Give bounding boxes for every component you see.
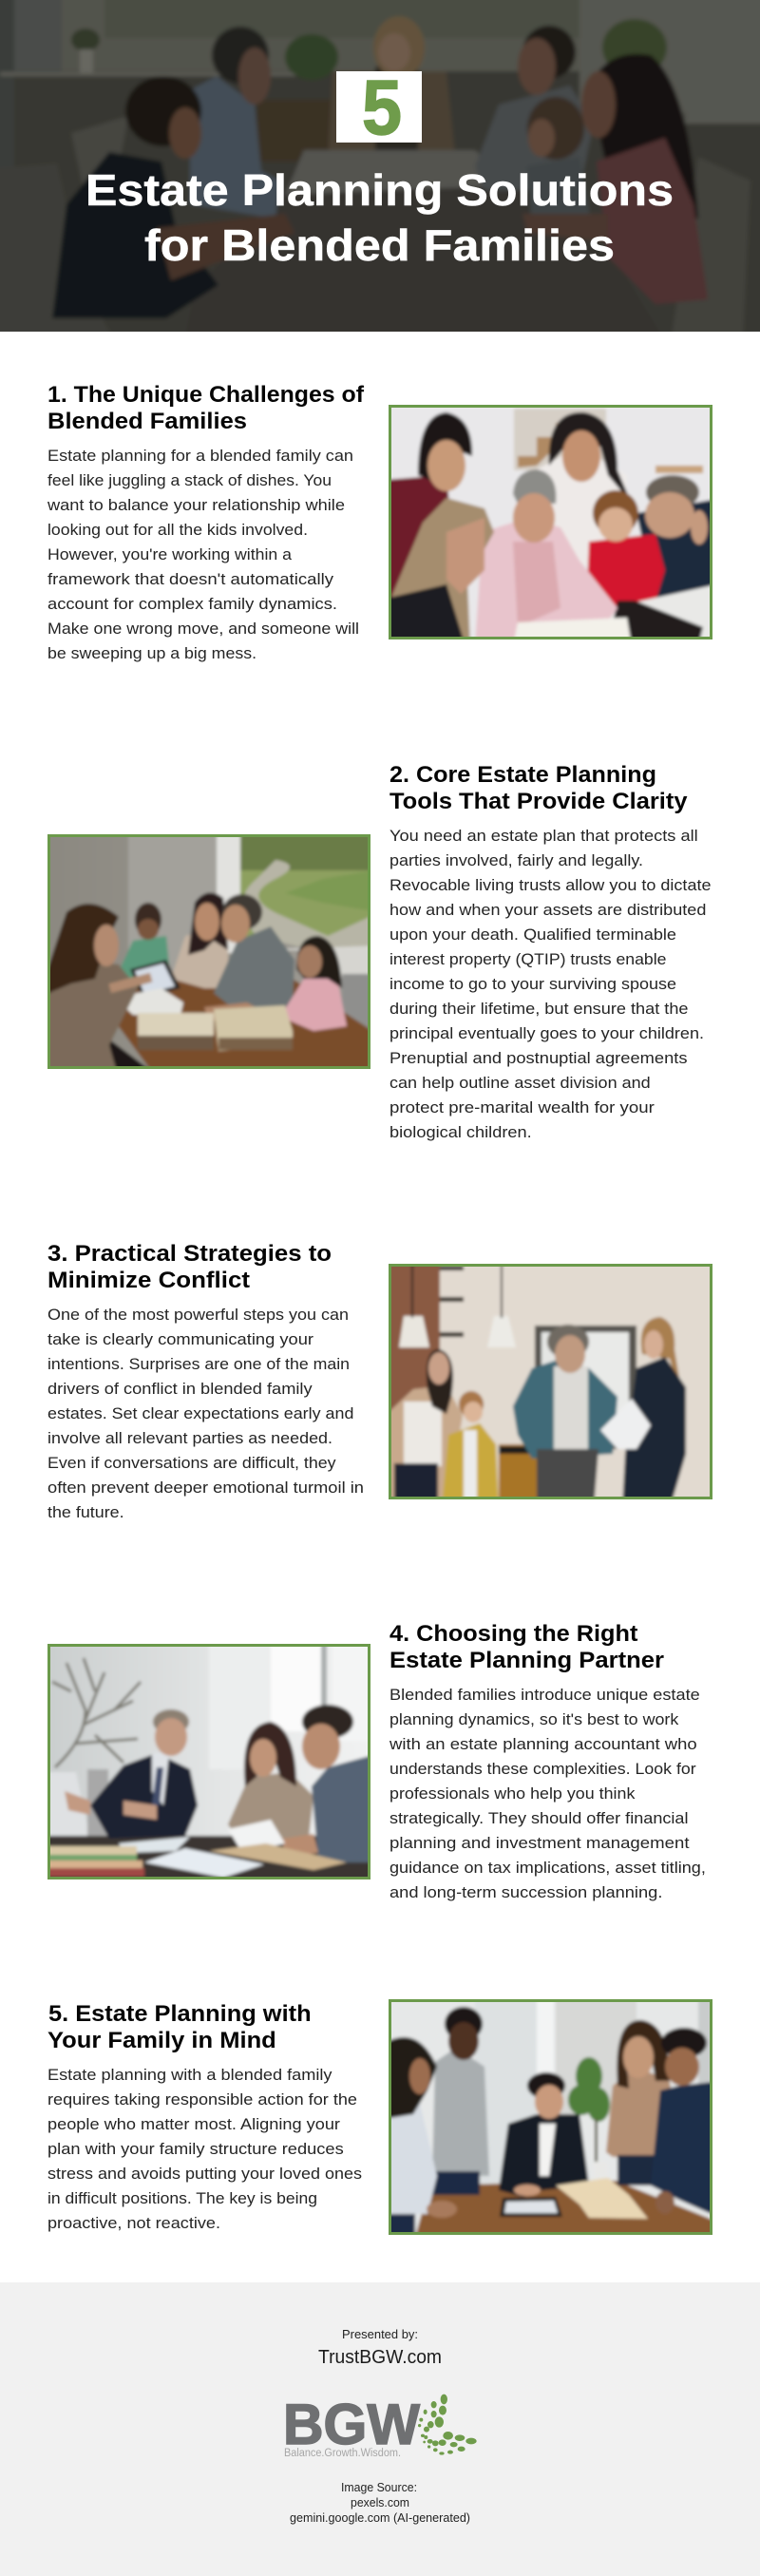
body text: section 2: protect pre-marital wealth for your — [390, 1099, 655, 1116]
tablet — [130, 960, 180, 998]
girl — [280, 979, 347, 1031]
body text: section 2: can help outline asset division and — [390, 1075, 651, 1092]
photo: family with advisor and tablet — [380, 1991, 722, 2244]
man — [432, 2048, 489, 2176]
body text: section 3: involve all relevant parties as needed. — [48, 1430, 332, 1447]
body text: section 5: Estate planning with a blended family — [48, 2067, 332, 2084]
heading: section 2: Tools That Provide Clarity — [390, 789, 688, 814]
woman right — [589, 54, 698, 219]
monitor — [50, 1771, 87, 1838]
body text: section 3: Even if conversations are difficult, they — [48, 1455, 336, 1472]
woman — [228, 1772, 314, 1839]
heading: section 2: 2. Core Estate Planning — [390, 762, 656, 788]
body text: section 4: understands these complexities. Look for — [390, 1761, 696, 1778]
section 4 — [38, 1621, 706, 1901]
body text: section 5 — [48, 2067, 362, 2232]
body text: section 5: requires taking responsible action for the — [48, 2091, 357, 2109]
icon: leaf swirl — [418, 2395, 476, 2454]
image source credits — [290, 2480, 470, 2525]
man in suit — [90, 1753, 198, 1839]
body text: section 3: intentions. Surprises are one of the main — [48, 1356, 350, 1373]
body text: section 1: framework that doesn't automatically — [48, 571, 334, 588]
body text: section 4: Blended families introduce unique estate — [390, 1687, 700, 1704]
body text: section 4: and long-term succession planning. — [390, 1884, 662, 1901]
heading: section 3 — [48, 1241, 332, 1293]
heading: section 2 — [390, 762, 688, 814]
table — [50, 1832, 368, 1877]
logo: BGW: Balance.Growth.Wisdom. — [284, 2448, 401, 2459]
woman right — [606, 2067, 676, 2157]
photo: advisor presenting to couple — [48, 1644, 370, 1880]
tablet — [500, 2197, 562, 2217]
body text: section 5: in difficult positions. The key is being — [48, 2190, 317, 2207]
body text: section 2: Prenuptial and postnuptial agreements — [390, 1050, 688, 1067]
hero background photo — [0, 0, 760, 332]
title — [86, 165, 674, 270]
logo: BGW — [283, 2393, 476, 2459]
folders — [114, 988, 183, 1015]
heading: section 4 — [390, 1621, 664, 1673]
man — [513, 1359, 618, 1459]
image source credits: pexels.com — [351, 2495, 409, 2509]
man right — [635, 498, 710, 599]
hero banner — [0, 0, 760, 332]
body text: section 4: professionals who help you think — [390, 1785, 636, 1803]
body text: section 3: often prevent deeper emotional turmoil in — [48, 1479, 364, 1497]
body text: section 1: However, you're working within a — [48, 546, 293, 563]
logo: BGW: BGW — [283, 2393, 420, 2456]
body text: section 3: drivers of conflict in blended family — [48, 1381, 313, 1398]
woman right — [638, 1315, 680, 1378]
section 5 — [48, 1991, 722, 2244]
woman left — [385, 2095, 437, 2214]
body text: section 2: principal eventually goes to your children. — [390, 1025, 704, 1042]
papers and folders — [228, 1820, 285, 1853]
body text: section 4: strategically. They should offer financial — [390, 1810, 688, 1827]
body text: section 1: feel like juggling a stack of dishes. You — [48, 472, 332, 489]
heading: section 4: Estate Planning Partner — [390, 1648, 664, 1673]
body text: section 2: Revocable living trusts allow you to dictate — [390, 877, 711, 894]
folders — [556, 2178, 648, 2219]
tree art — [52, 1658, 141, 1767]
presented by text: Presented by: — [342, 2327, 418, 2341]
body text: section 2: You need an estate plan that protects all — [390, 828, 698, 845]
advisor — [499, 2114, 589, 2197]
body text: section 1 — [47, 448, 359, 662]
girl back left — [391, 473, 450, 601]
centre woman — [475, 518, 618, 646]
table — [413, 2181, 722, 2244]
body text: section 5: people who matter most. Aligning your — [48, 2116, 341, 2133]
body text: section 4: planning dynamics, so it's best to work — [390, 1711, 679, 1728]
plant — [568, 2057, 610, 2122]
body text: section 2: income to go to your surviving spouse — [390, 976, 676, 993]
table — [118, 979, 368, 1066]
heading: section 4: 4. Choosing the Right — [390, 1621, 637, 1647]
body text: section 3: One of the most powerful steps you can — [48, 1307, 349, 1324]
website name: TrustBGW.com — [318, 2347, 442, 2368]
photo: advisor with family at table — [48, 834, 370, 1069]
body text: section 4: planning and investment management — [390, 1835, 690, 1852]
body text: section 3 — [48, 1307, 364, 1521]
section 3 — [48, 1241, 722, 1521]
heading: section 5 — [48, 2001, 312, 2053]
man right — [312, 1753, 380, 1862]
blonde woman — [385, 498, 494, 646]
body text: section 1: Make one wrong move, and someone will — [48, 620, 359, 638]
woman centre — [329, 71, 454, 150]
number badge — [336, 65, 422, 151]
boy — [52, 152, 218, 318]
heading: section 1: Blended Families — [48, 409, 247, 434]
body text: section 4: with an estate planning accountant who — [389, 1736, 697, 1753]
body text: section 3: the future. — [48, 1504, 124, 1521]
section 2 — [38, 762, 711, 1141]
body text: section 2: parties involved, fairly and legally. — [390, 852, 643, 869]
body text: section 3: estates. Set clear expectations early and — [48, 1405, 353, 1422]
section 1 — [47, 382, 722, 662]
girl — [528, 190, 589, 215]
body text: section 4 — [389, 1687, 706, 1901]
woman left — [391, 1385, 464, 1497]
body text: section 4: guidance on tax implications, asset titling, — [390, 1860, 706, 1877]
body text: section 5: proactive, not reactive. — [48, 2215, 220, 2232]
heading: section 5: 5. Estate Planning with — [48, 2001, 312, 2027]
title: for Blended Families — [144, 220, 615, 270]
man right — [475, 86, 594, 190]
heading: section 3: Minimize Conflict — [48, 1268, 250, 1293]
body text: section 2: how and when your assets are distributed — [390, 902, 706, 919]
body text: section 1: be sweeping up a big mess. — [48, 645, 256, 662]
body text: section 1: want to balance your relationship while — [47, 497, 345, 514]
back woman — [538, 456, 608, 471]
body text: section 2: during their lifetime, but ensure that the — [390, 1001, 688, 1018]
table — [177, 150, 689, 380]
number badge: 5 — [362, 65, 402, 151]
photo: couple and child with advisor — [389, 1264, 712, 1499]
body text: section 2: biological children. — [390, 1124, 532, 1141]
woman centre — [171, 926, 228, 988]
man — [214, 926, 294, 1012]
footer panel — [0, 2282, 760, 2576]
image source credits: Image Source: — [341, 2480, 417, 2494]
body text: section 2 — [390, 828, 711, 1141]
heading: section 1 — [48, 382, 365, 434]
body text: section 1: looking out for all the kids involved. — [48, 522, 308, 539]
table — [636, 582, 710, 610]
body text: section 2: upon your death. Qualified terminable — [390, 926, 676, 944]
heading: section 3: 3. Practical Strategies to — [48, 1241, 332, 1267]
body text: section 5: stress and avoids putting your loved ones — [48, 2166, 362, 2183]
body text: section 5: plan with your family structure reduces — [48, 2141, 344, 2158]
body text: section 1: account for complex family dynamics. — [48, 596, 337, 613]
boy — [587, 534, 665, 608]
man left blue — [190, 76, 280, 219]
boy — [120, 935, 170, 979]
body text: section 1: Estate planning for a blended family can — [48, 448, 353, 465]
kid — [442, 1423, 499, 1509]
advisor — [50, 963, 139, 1066]
heading: section 5: Your Family in Mind — [48, 2028, 276, 2053]
body text: section 3: take is clearly communicating your — [48, 1331, 314, 1348]
title: Estate Planning Solutions — [86, 165, 674, 215]
body text: section 2: interest property (QTIP) trusts enable — [390, 951, 667, 968]
photo: family reviewing documents — [389, 405, 712, 639]
heading: section 1: 1. The Unique Challenges of — [48, 382, 365, 408]
image source credits: gemini.google.com (AI-generated) — [290, 2510, 470, 2525]
boy — [651, 2081, 722, 2219]
